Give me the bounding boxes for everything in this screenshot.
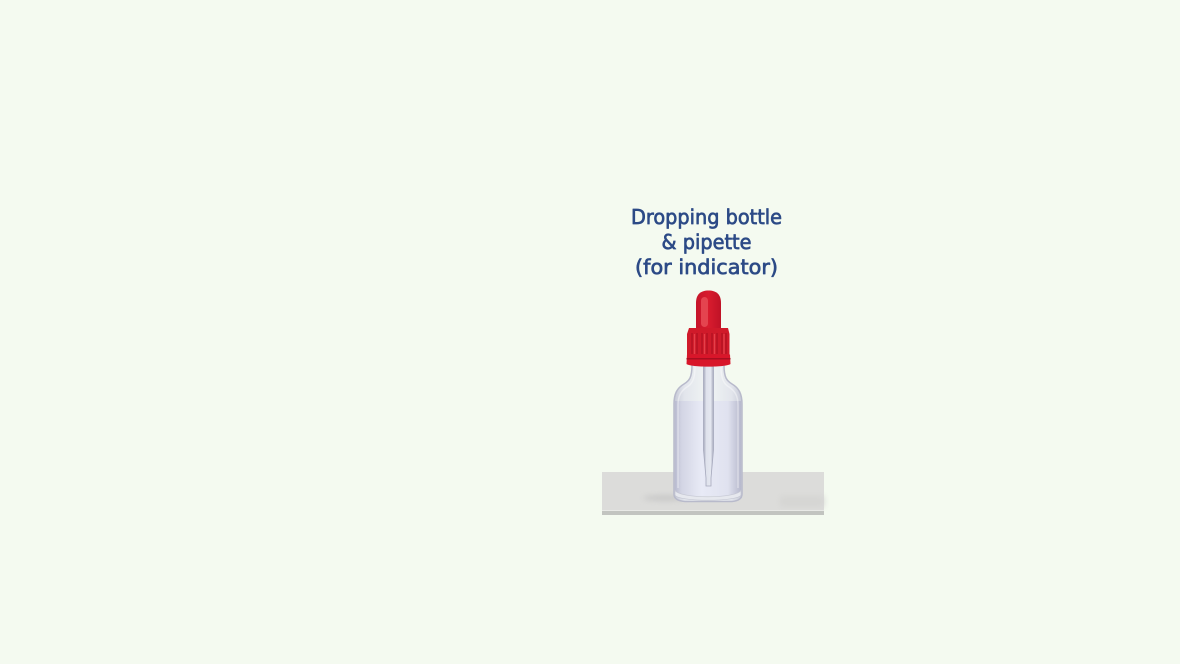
title: dropping bottle and pipette label: Dropping bottle	[631, 205, 782, 229]
title: dropping bottle and pipette label: (for indicator)	[635, 255, 778, 279]
red dropper cap	[686, 290, 730, 367]
bottle glass body	[674, 365, 742, 502]
bulb highlight	[701, 297, 708, 327]
inner glass edges	[678, 367, 738, 488]
table surface	[602, 472, 824, 515]
bottle base	[675, 490, 741, 500]
cap collar	[686, 354, 730, 367]
liquid in bottle	[675, 401, 741, 496]
pipette	[704, 366, 714, 486]
title: dropping bottle and pipette label: & pipette	[662, 230, 752, 254]
dropping bottle	[674, 365, 742, 502]
ribbed screw cap	[687, 328, 730, 356]
rubber bulb	[696, 290, 721, 332]
title: dropping bottle and pipette label	[631, 205, 782, 279]
